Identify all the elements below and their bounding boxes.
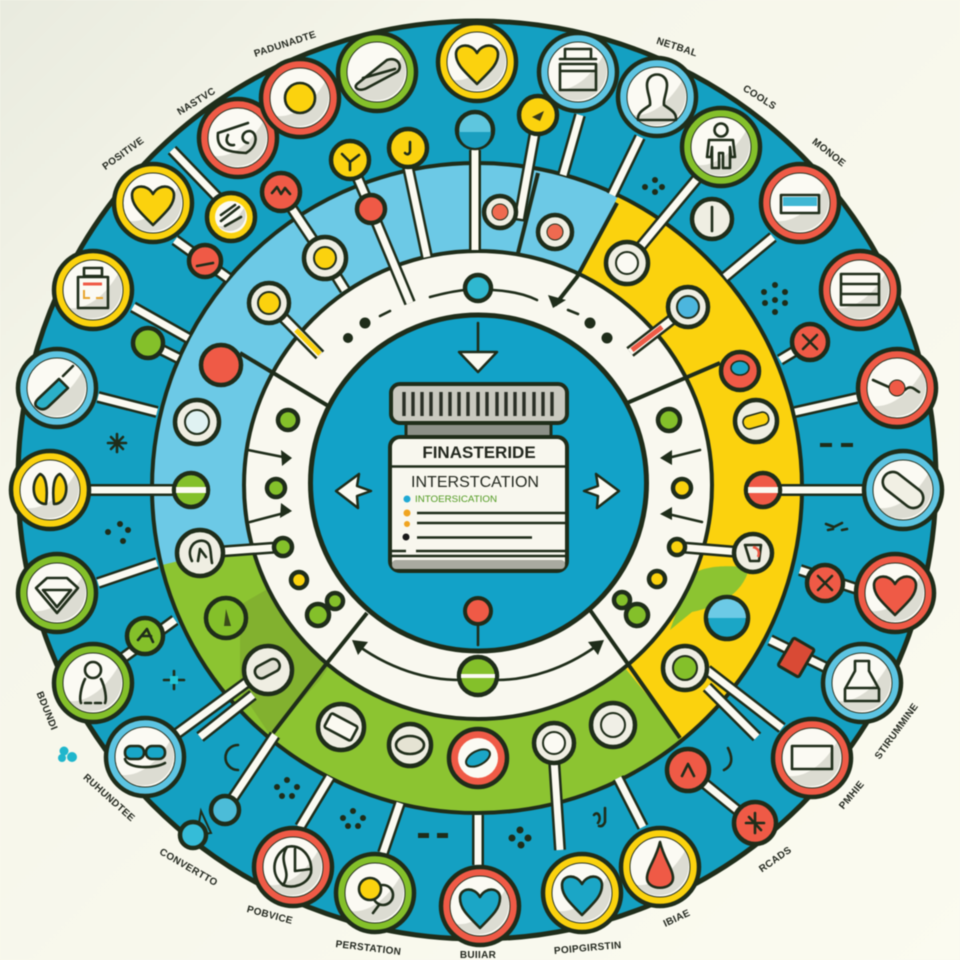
small: white rect [318,704,364,750]
label: POSITIVE [101,135,146,173]
label: CONVERTTO [157,847,219,889]
label: RCADS [757,845,794,875]
small: ring yellow pill [735,400,777,442]
node: red dot [858,349,936,427]
dot: yellow [673,479,691,497]
small: green leaf [127,618,163,654]
bottle cap [391,384,567,423]
inner disc [310,315,646,651]
node: blue person [618,58,696,136]
small: yellow [519,96,557,134]
label: POIPGIRSTIN [554,940,622,957]
small: ring white [606,242,648,284]
node: red pill bottom [449,729,507,787]
small: white pill [692,199,732,239]
small: blue teardrop [180,811,211,848]
node: yellow kidneys [11,451,89,529]
white ring [244,251,712,719]
small: red [357,195,385,223]
dumbbell left [307,593,343,626]
small: red [189,245,221,277]
node: blue glasses [106,718,184,796]
small nodes [127,96,843,848]
small: red x [792,324,828,360]
dumbbell right [614,592,648,626]
small: ring blue [175,400,219,444]
node: blue bottle [823,644,901,722]
node: red swirl [199,99,277,177]
node: small red x [734,802,776,844]
small: ring yellow handle [249,283,289,323]
segment patch: green on yellow [670,565,750,630]
label: RUHUNDTEE [81,772,137,824]
small: white oval [389,724,431,766]
small: top blue dot [465,275,491,301]
small: green [206,598,246,638]
dot: green [267,479,285,497]
small: green [133,328,163,358]
label: NETBAL [655,36,699,59]
connectors [80,115,865,865]
node: red rectangle [761,164,839,242]
small: ring yellow [304,237,346,279]
small decoration marks [58,177,853,848]
node: yellow drop [621,828,699,906]
small: ring green [663,646,707,690]
handle end red [632,327,662,350]
label: COOLS [741,83,778,112]
node: yellow heart [114,164,192,242]
small: white icon [177,530,223,576]
center: red dot [465,598,491,645]
bottle list [392,496,565,551]
segment: yellow [581,196,801,739]
dot: green [278,410,298,430]
small: red cylinder [778,638,815,677]
dot: green [274,538,292,556]
dot: yellow [669,539,685,555]
small: yellow y [331,141,369,179]
small: white red icon [734,534,772,572]
dot: green [658,409,680,431]
small: red zigzag [262,173,300,211]
small: ring red [538,215,572,249]
node: red rectangle lower [773,719,851,797]
node: red bean [254,828,332,906]
node: green magnifier [336,854,414,932]
node: yellow jar [54,251,132,329]
small: lower blue [211,796,239,824]
small: blue [457,112,493,148]
segment: green [162,554,682,812]
small: yellow note [389,129,427,167]
node: red list [821,251,899,329]
middle ring segments [149,160,805,816]
small: ring blue [668,287,708,327]
node: yellow teal heart [543,854,621,932]
small: red teal [721,352,759,390]
label: title: FINASTERIDE [422,443,536,462]
node: blue tube [18,349,96,427]
small: red x [807,565,843,601]
center: top triangle [459,323,497,372]
bottle [390,384,567,571]
small: half blue [706,597,748,639]
label: POBVICE [245,904,294,927]
label: BDUNDI [34,690,59,732]
label: PERSTATION [335,939,402,958]
small: ring white [591,703,635,747]
node: green diamond [18,554,96,632]
node: red with yellow dot [261,59,339,137]
node: green person [682,108,760,186]
label: PMHIE [837,779,867,812]
dot: yellow [649,571,665,587]
center: right arrow [584,474,619,508]
small: red band [746,473,780,507]
label: NASTVC [176,86,218,118]
small: ring white [534,723,574,763]
handle end [296,330,320,354]
bottle neck [406,422,551,438]
small: ring red [484,196,516,228]
node: green person lower [54,644,132,722]
small: bottom green [459,657,497,695]
dividers [240,173,720,738]
small: white pill [244,646,292,694]
dot: yellow [291,572,307,588]
label: subtitle: INTERSTCATION [411,474,539,491]
white ring marks and arrows [248,290,702,680]
small: green band [174,473,208,507]
node: blue jar [539,33,617,111]
label: PADUNADTE [253,29,318,60]
label: MONOE [810,137,847,169]
bottle body [390,437,567,571]
small: yellow pill [207,193,255,241]
segment patch: shaded green [240,570,360,735]
node: red teal heart [441,867,519,945]
node: red heart [856,554,934,632]
node: green pill [338,33,416,111]
label: IBIAE [662,908,692,930]
small: red [667,749,709,791]
small: red large [201,345,241,385]
label: STIRUMMINE [873,701,921,762]
node: yellow heart top [438,23,516,101]
center: left arrow [336,474,371,508]
label: small: INTOERSICATION [415,494,497,505]
node: blue pill [864,451,942,529]
